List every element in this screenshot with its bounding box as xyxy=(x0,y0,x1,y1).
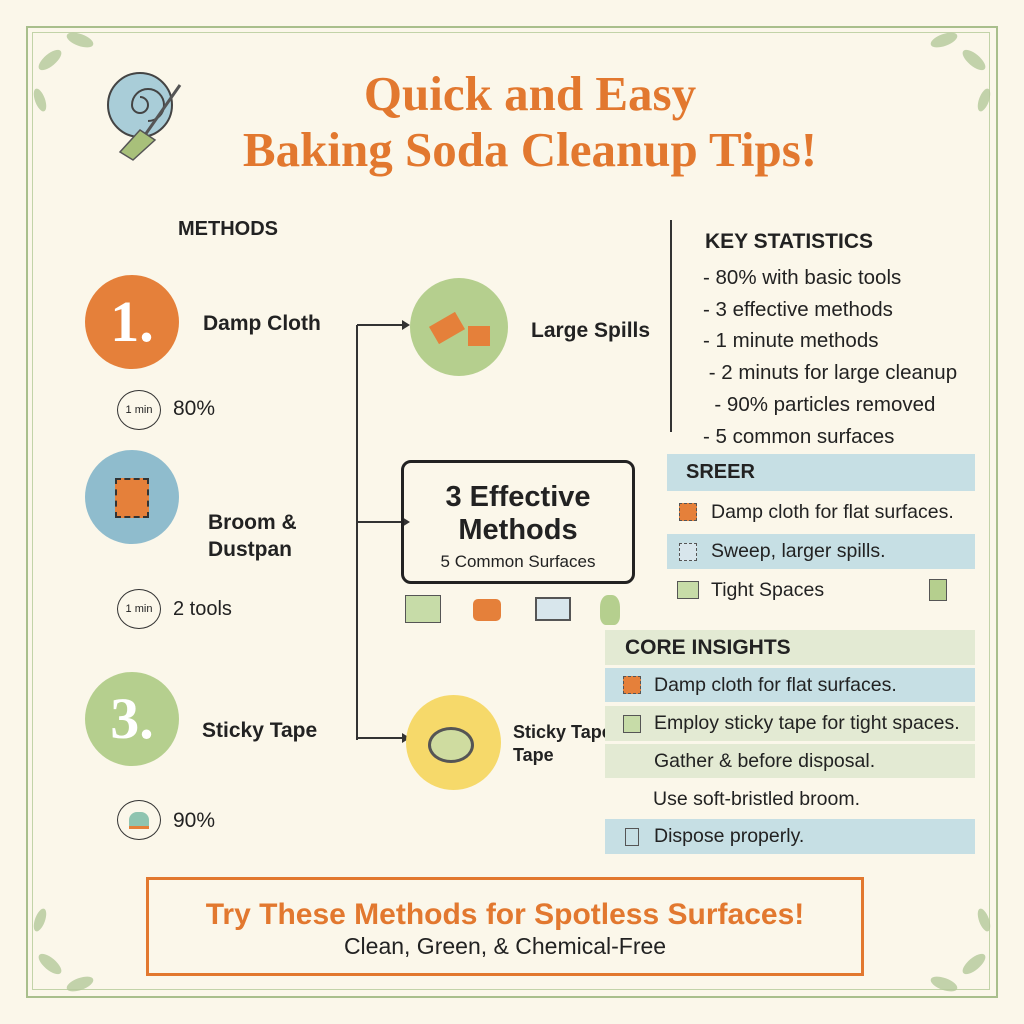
surface icons xyxy=(405,595,620,625)
sticky tape: Sticky Tape xyxy=(513,722,612,742)
panel: core insights: Dispose properly. xyxy=(654,825,804,847)
key statistics: - 1 minute methods xyxy=(703,329,878,352)
sticky tape: Tape xyxy=(513,745,554,765)
footer callout xyxy=(146,877,864,976)
method 2 xyxy=(85,450,297,629)
title: Baking Soda Cleanup Tips! xyxy=(243,122,817,177)
key statistics: - 5 common surfaces xyxy=(703,425,894,448)
title: Quick and Easy xyxy=(364,66,696,121)
panel: sreer: Damp cloth for flat surfaces. xyxy=(711,501,954,523)
panel: sreer: Tight Spaces xyxy=(711,579,824,601)
method 2: 2 tools xyxy=(173,598,232,620)
method 3: Sticky Tape xyxy=(202,719,317,742)
panel: core insights: Damp cloth for flat surfaces. xyxy=(654,674,897,696)
key statistics: - 2 minuts for large cleanup xyxy=(709,361,957,384)
panel: core insights xyxy=(605,630,975,854)
center box xyxy=(401,460,635,584)
footer callout: Try These Methods for Spotless Surfaces! xyxy=(206,898,804,931)
method 1: 1 min xyxy=(126,404,152,416)
panel: sreer: Sweep, larger spills. xyxy=(711,540,886,562)
key statistics: - 90% particles removed xyxy=(714,393,935,416)
key statistics: - 80% with basic tools xyxy=(703,266,901,289)
method 3 xyxy=(85,672,317,840)
method 3: 90% xyxy=(173,809,215,832)
heading: methods: METHODS xyxy=(178,218,278,240)
title xyxy=(243,66,817,177)
method 2: Broom & xyxy=(208,511,297,534)
key statistics: - 3 effective methods xyxy=(703,298,893,321)
sticky tape xyxy=(406,695,612,790)
footer callout: Clean, Green, & Chemical-Free xyxy=(344,933,666,959)
method 1: 80% xyxy=(173,397,215,420)
key statistics: KEY STATISTICS xyxy=(705,230,873,253)
center box: 5 Common Surfaces xyxy=(441,552,595,571)
large spills: Large Spills xyxy=(531,319,650,342)
method 1 xyxy=(85,275,321,430)
method 2: 1 min xyxy=(126,603,152,615)
method 2: Dustpan xyxy=(208,538,292,561)
panel: sreer: SREER xyxy=(686,461,755,483)
method 1: 1. xyxy=(110,289,154,354)
panel: core insights: CORE INSIGHTS xyxy=(625,636,791,659)
method 3: 3. xyxy=(110,686,154,751)
large spills xyxy=(410,278,650,376)
panel: core insights: Employ sticky tape for tight spaces. xyxy=(654,712,960,734)
key statistics xyxy=(670,220,957,448)
panel: core insights: Gather & before disposal. xyxy=(654,750,875,772)
icon: cloud with broom xyxy=(107,72,182,161)
method 1: Damp Cloth xyxy=(203,312,321,335)
arrows xyxy=(356,320,410,743)
panel: sreer xyxy=(667,454,975,601)
center box: Methods xyxy=(458,514,578,546)
center box: 3 Effective xyxy=(445,481,591,513)
panel: core insights: Use soft-bristled broom. xyxy=(653,788,860,810)
